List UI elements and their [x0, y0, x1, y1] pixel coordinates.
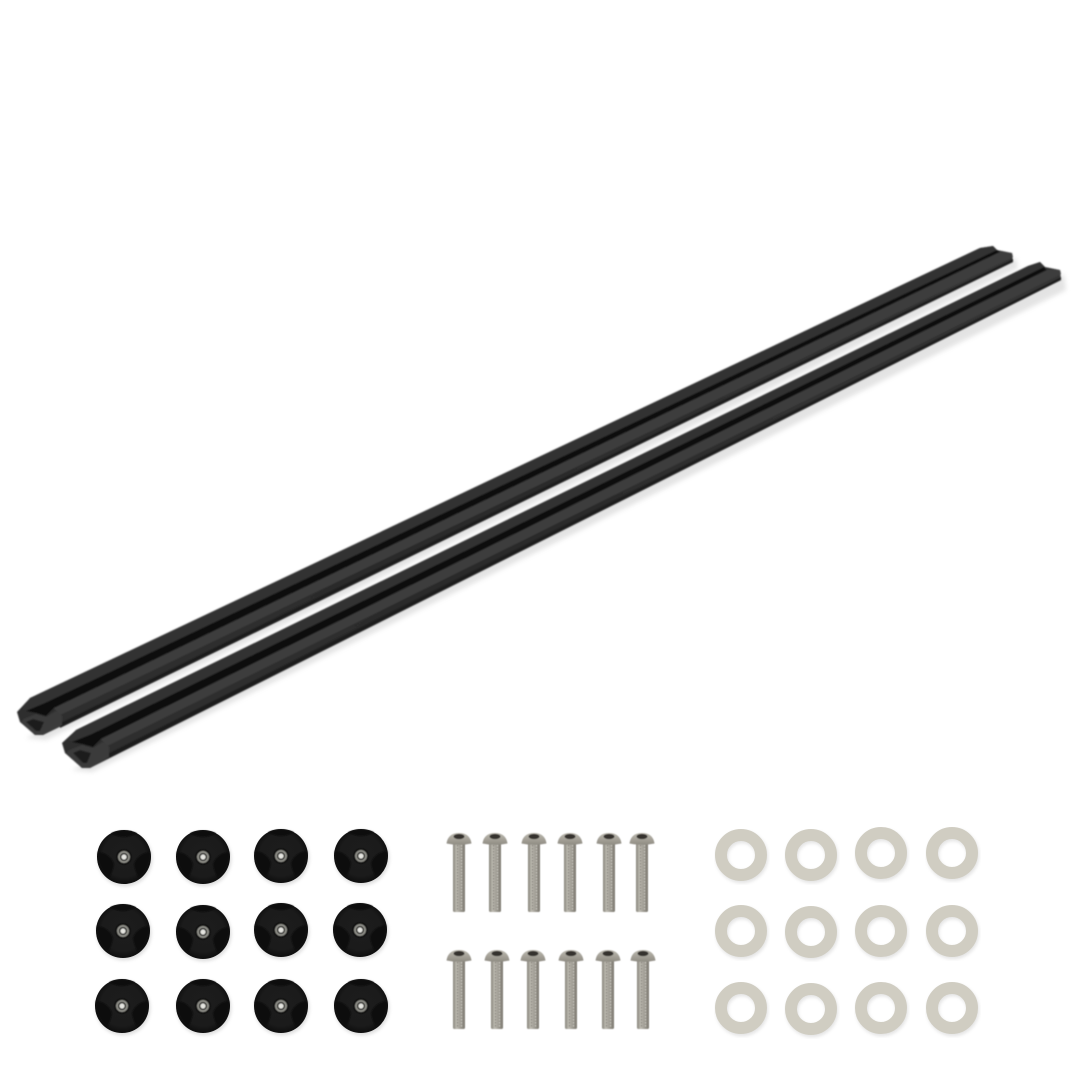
washers: 12 flat rings: [721, 833, 973, 1031]
knobs: 12 black mounting caps: [95, 829, 390, 1036]
rail: front: [62, 262, 1066, 772]
bolts: 12 stainless button-head screws: [446, 833, 656, 1029]
rail: rear: [17, 246, 1018, 740]
